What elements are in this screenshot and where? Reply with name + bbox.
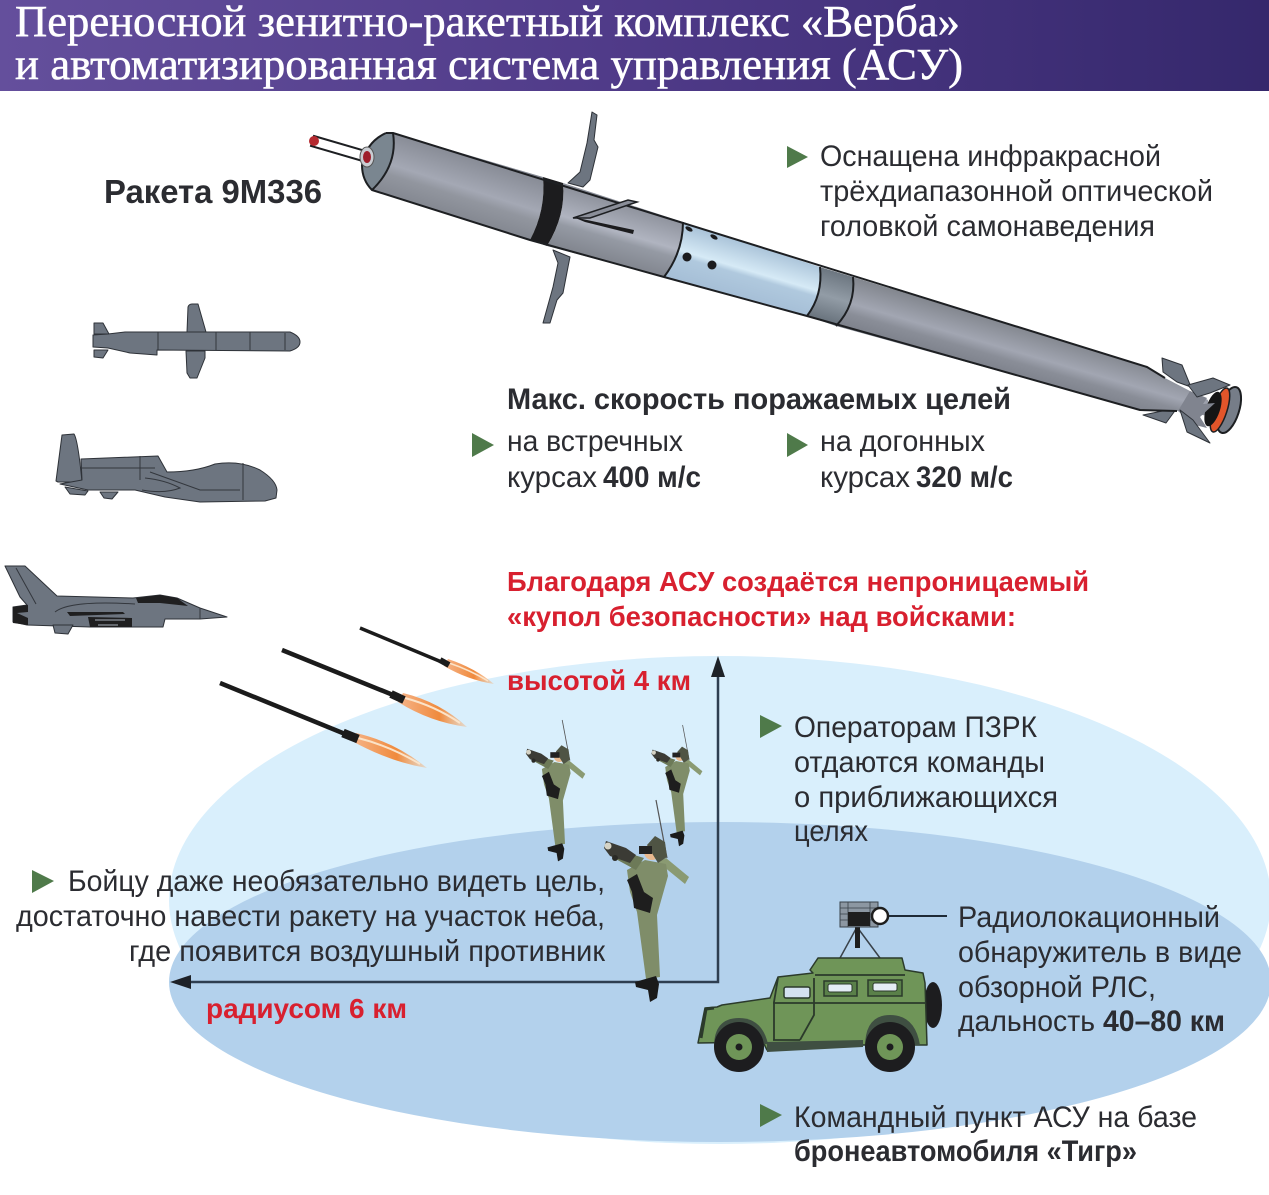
red heading: security dome [507,566,1089,632]
soldier, rear right [651,725,702,846]
tail nozzle [1178,378,1246,443]
title banner [0,0,1269,91]
note: seeker head: Оснащена инфракрасной [820,140,1161,173]
ports [682,225,718,270]
rocket 1 [360,628,494,684]
icon: cruise missile target [93,304,300,378]
title line 2: и автоматизированная система управления (АСУ) [15,40,963,89]
note: pursuit speed: 320 м/с [916,461,1013,494]
note: command post [760,1101,1197,1168]
radar on tripod [840,902,947,958]
note: fighter does not need to see target: Бойцу даже необязательно видеть цель, [68,865,605,898]
rear wheel [865,1015,920,1072]
note: head-on speed: курсах [507,461,597,494]
rocket 2 [282,650,467,727]
dark band [807,267,853,326]
label: radius: радиусом 6 км [206,993,407,1024]
label: missile name: Ракета 9М336 [104,173,322,210]
axes: altitude and radius arrows [170,656,725,989]
seeker probe [309,136,374,167]
front canard fins [543,112,598,323]
rocket 3 [220,683,427,768]
vehicle body [698,958,927,1050]
mid section [547,183,683,277]
note: PZRK operators [760,711,1058,848]
note: pursuit speed: курсах [820,461,910,494]
note: radar detector: обзорной РЛС, [958,971,1156,1004]
note: command post: бронеавтомобиля «Тигр» [794,1135,1137,1168]
section seams and outline [362,133,1177,411]
light-blue section [664,222,820,316]
red heading: security dome: Благодаря АСУ создаётся непроницаемый [507,566,1089,597]
illustration: Tigr armored vehicle with radar [698,902,947,1072]
note: radar detector [958,901,1242,1038]
note: PZRK operators: Операторам ПЗРК [794,711,1037,744]
front section [372,133,543,240]
note: PZRK operators: о приближающихся [794,781,1058,814]
illustration: 9M336 missile [309,112,1246,443]
label: altitude: высотой 4 км [507,665,691,696]
outer light dome [169,656,1269,1144]
mid wing [573,200,637,234]
note: radar detector: 40–80 км [1103,1005,1225,1038]
body seams [773,975,925,1040]
note: fighter does not need to see target: где появится воздушный противник [129,935,606,968]
dome: security zone [169,656,1269,1144]
soldier, front [604,800,689,1002]
note: seeker head: трёхдиапазонной оптической [820,175,1213,208]
lower sill [767,1040,863,1052]
heading: target speed: Макс. скорость поражаемых целей [507,383,1011,416]
note: radar detector: обнаружитель в виде [958,936,1242,969]
tail fins [1143,358,1191,423]
black band [530,177,563,246]
front wheel [714,1018,768,1072]
spare tire [924,982,942,1028]
note: fighter does not need to see target [16,865,606,968]
red heading: security dome: «купол безопасности» над войсками: [507,601,1016,632]
note: head-on speed: на встречных [507,425,683,458]
note: radar detector: Радиолокационный [958,901,1220,934]
nose cap [362,133,394,190]
note: fighter does not need to see target: достаточно навести ракету на участок неба, [16,900,605,933]
launched missiles [220,628,494,768]
note: head-on speed [472,425,701,494]
note: radar detector: дальность [958,1005,1095,1038]
inner ground ellipse [169,822,1269,1142]
windows [784,980,902,998]
bull bar [701,1008,714,1038]
note: pursuit speed: на догонных [820,425,985,458]
missile rear section [836,277,1208,416]
note: command post: Командный пункт АСУ на базе [794,1101,1197,1134]
note: PZRK operators: отдаются команды [794,746,1045,779]
icon: drone target [56,434,277,502]
note: pursuit speed [787,425,1013,494]
icon: fighter jet target [5,566,227,634]
note: seeker head [787,140,1213,243]
note: seeker head: головкой самонаведения [820,210,1155,243]
soldier, rear left [526,720,585,861]
note: head-on speed: 400 м/с [603,461,701,494]
note: PZRK operators: целях [794,815,868,848]
